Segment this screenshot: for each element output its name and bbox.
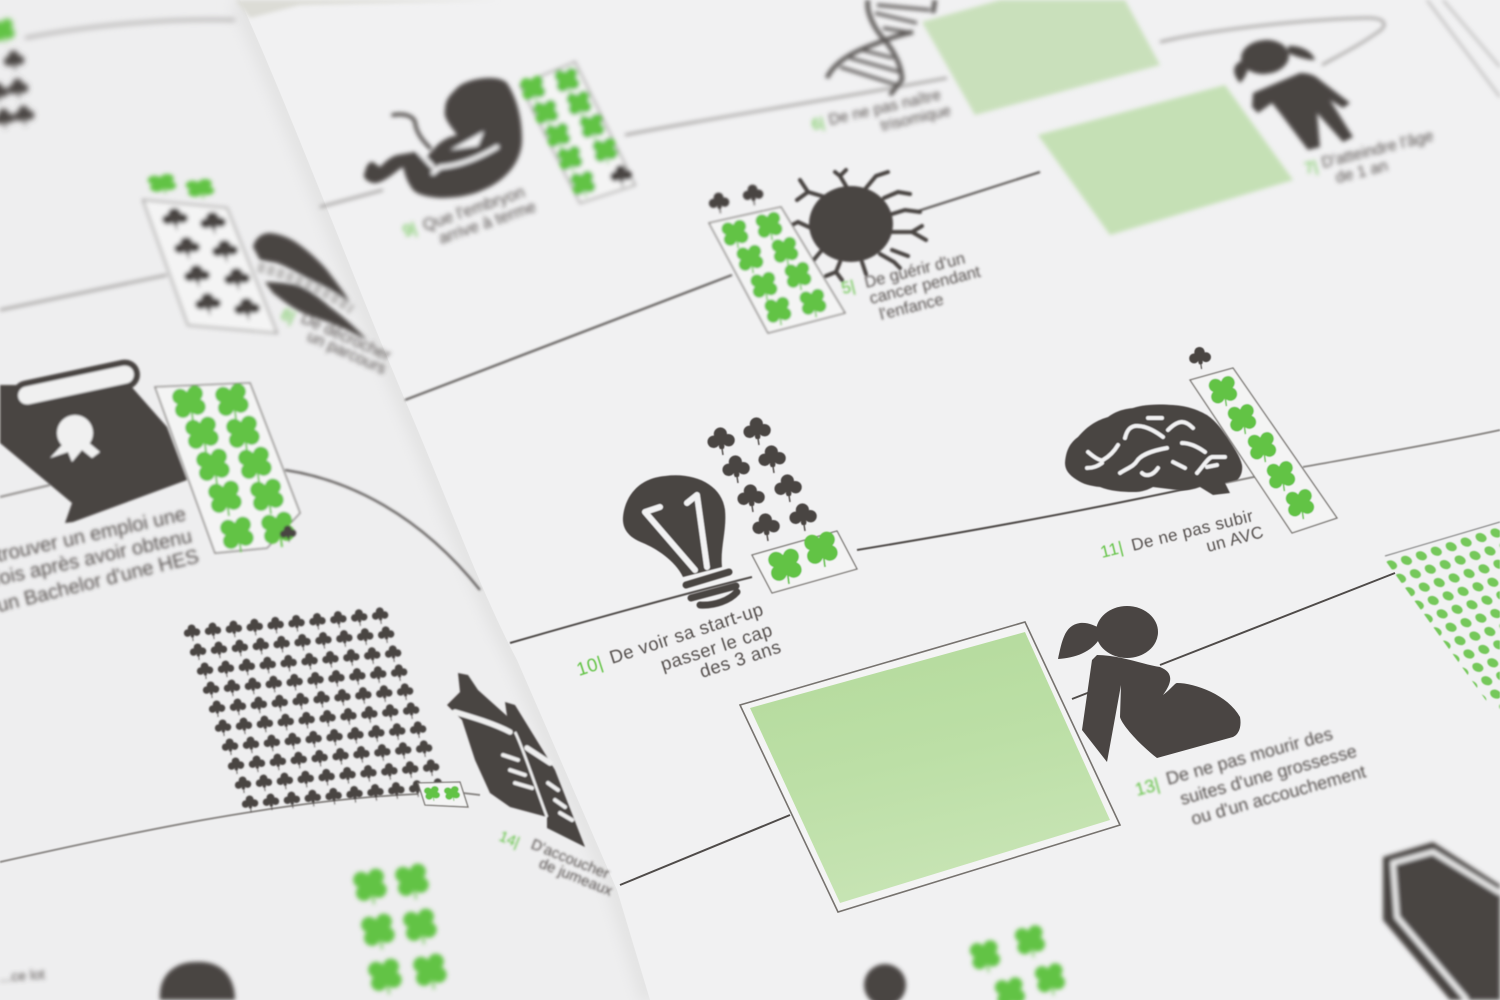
caption: bottom left: ...ce lot <box>0 966 45 985</box>
clover box: item 11 <box>1188 346 1337 533</box>
item 9 connector line <box>320 78 947 207</box>
caption: item 9: arrive à terme <box>436 198 539 248</box>
item 13 connector line <box>620 573 1395 885</box>
caption: diploma <box>0 503 201 617</box>
caption: item 14: de jumeaux <box>537 855 615 900</box>
left page background <box>0 0 650 1000</box>
caption: item 9 <box>400 183 539 248</box>
caption: item 10 <box>574 598 784 682</box>
item 8 connector line <box>0 275 167 310</box>
caption: item 13: 13| <box>1133 774 1162 800</box>
caption: item 5: cancer pendant <box>868 263 983 308</box>
panel: left page bottom <box>0 862 448 1000</box>
caption: item 6: De ne pas naître <box>827 87 943 129</box>
icon: figure at bottom left <box>160 962 235 1000</box>
item 10 connector line <box>510 488 1190 643</box>
diploma connector line <box>0 485 50 497</box>
caption: diploma: un Bachelor d'une HES <box>0 546 201 617</box>
icon: dome with stripe <box>253 233 367 340</box>
gutter shading on left page <box>240 0 650 1000</box>
item 5 connector line <box>405 172 1040 400</box>
caption: item 6: 6| <box>810 114 826 134</box>
icon: cancer cell <box>790 170 926 280</box>
caption: item 10: des 3 ans <box>697 636 784 682</box>
icon: head at bottom <box>864 964 906 1000</box>
item 14 connector line <box>0 793 480 862</box>
large green square <box>740 622 1120 912</box>
icon: girl <box>1234 38 1353 150</box>
clover box: item 10 <box>752 530 857 593</box>
caption: item 11: De ne pas subir <box>1129 506 1255 555</box>
caption: item 10: passer le cap <box>658 619 775 675</box>
icon: diploma scroll <box>0 360 187 523</box>
panel: item 8 <box>0 173 394 378</box>
caption: item 13 <box>1133 724 1368 829</box>
right connector line <box>1225 430 1500 483</box>
pale green block: item 7 <box>1038 85 1293 235</box>
caption: item 5: 5| <box>840 277 857 298</box>
icon: pregnant woman <box>1058 606 1241 762</box>
book gutter backdrop <box>235 0 500 18</box>
page corner outline <box>1427 0 1500 97</box>
icon: coffin <box>1383 842 1500 1000</box>
clover box: item 14 <box>418 782 468 807</box>
top arc line <box>25 20 235 38</box>
clover box: diploma <box>155 382 300 553</box>
panel: item 10 start-up <box>510 416 1190 682</box>
clover box: item 5 <box>708 184 845 333</box>
caption: diploma: trouver un emploi une <box>0 503 188 567</box>
caption: item 7: D'atteindre l'âge <box>1320 128 1435 172</box>
icon: baby bottle <box>447 673 585 847</box>
caption: item 5 <box>840 249 983 324</box>
caption: item 10: 10| <box>574 652 606 680</box>
icon: brain <box>1065 404 1242 495</box>
panel: bottom right <box>864 842 1500 1000</box>
loop line to girl <box>1160 18 1384 65</box>
green clovers: bottom <box>969 924 1066 1000</box>
icon: light bulb <box>623 475 737 605</box>
caption: item 11: 11| <box>1098 538 1126 562</box>
caption: item 13: De ne pas mourir des <box>1164 724 1335 789</box>
caption: item 13: suites d'une grossesse <box>1178 741 1359 809</box>
panel: item 14 bottle <box>0 607 615 900</box>
dark clovers: item 10 <box>706 416 818 541</box>
caption: item 8: De décrocher <box>298 310 394 365</box>
curved line to gutter <box>285 470 480 590</box>
clover box: item 8 <box>143 173 277 333</box>
caption: item 9: 9| <box>400 219 419 241</box>
caption: item 8: 8| <box>278 306 297 327</box>
panel: item 5 cancer <box>405 170 1040 400</box>
caption: item 6: trisomique <box>879 102 953 135</box>
caption: item 11 <box>1098 506 1266 562</box>
icon: embryo <box>364 78 522 198</box>
panel: upper right page <box>320 0 1500 248</box>
caption: item 10: De voir sa start-up <box>607 598 766 668</box>
caption: item 7: 7| <box>1303 158 1320 178</box>
panel: item 11 stroke <box>1065 346 1500 562</box>
panel: item 13 pregnancy <box>620 522 1500 912</box>
caption: item 5: De guérir d'un <box>863 249 967 292</box>
icon: DNA helix <box>827 0 935 95</box>
green clovers: bottom left <box>352 862 448 994</box>
caption: item 8 <box>278 306 394 378</box>
caption: item 14 <box>497 828 615 900</box>
clovers: top left <box>0 17 35 129</box>
caption: item 13: ou d'un accouchement <box>1189 761 1368 829</box>
green dot field <box>1385 522 1500 715</box>
panel: left page top <box>0 17 235 129</box>
dark clover grid <box>183 607 447 812</box>
caption: item 11: un AVC <box>1204 522 1266 556</box>
caption: item 7: de 1 an <box>1334 157 1390 187</box>
caption: item 7 <box>1303 128 1435 187</box>
clover box: item 9 <box>519 62 635 203</box>
caption: item 14: D'accoucher <box>529 836 612 883</box>
pale green block: item 6 <box>922 0 1160 115</box>
panel: item diploma <box>0 360 480 617</box>
caption: item 14: 14| <box>497 828 522 851</box>
caption: item 8: un parcours <box>304 328 388 378</box>
caption: item 5: l'enfance <box>878 291 946 324</box>
caption: item 9: Que l'embryon <box>420 183 527 235</box>
